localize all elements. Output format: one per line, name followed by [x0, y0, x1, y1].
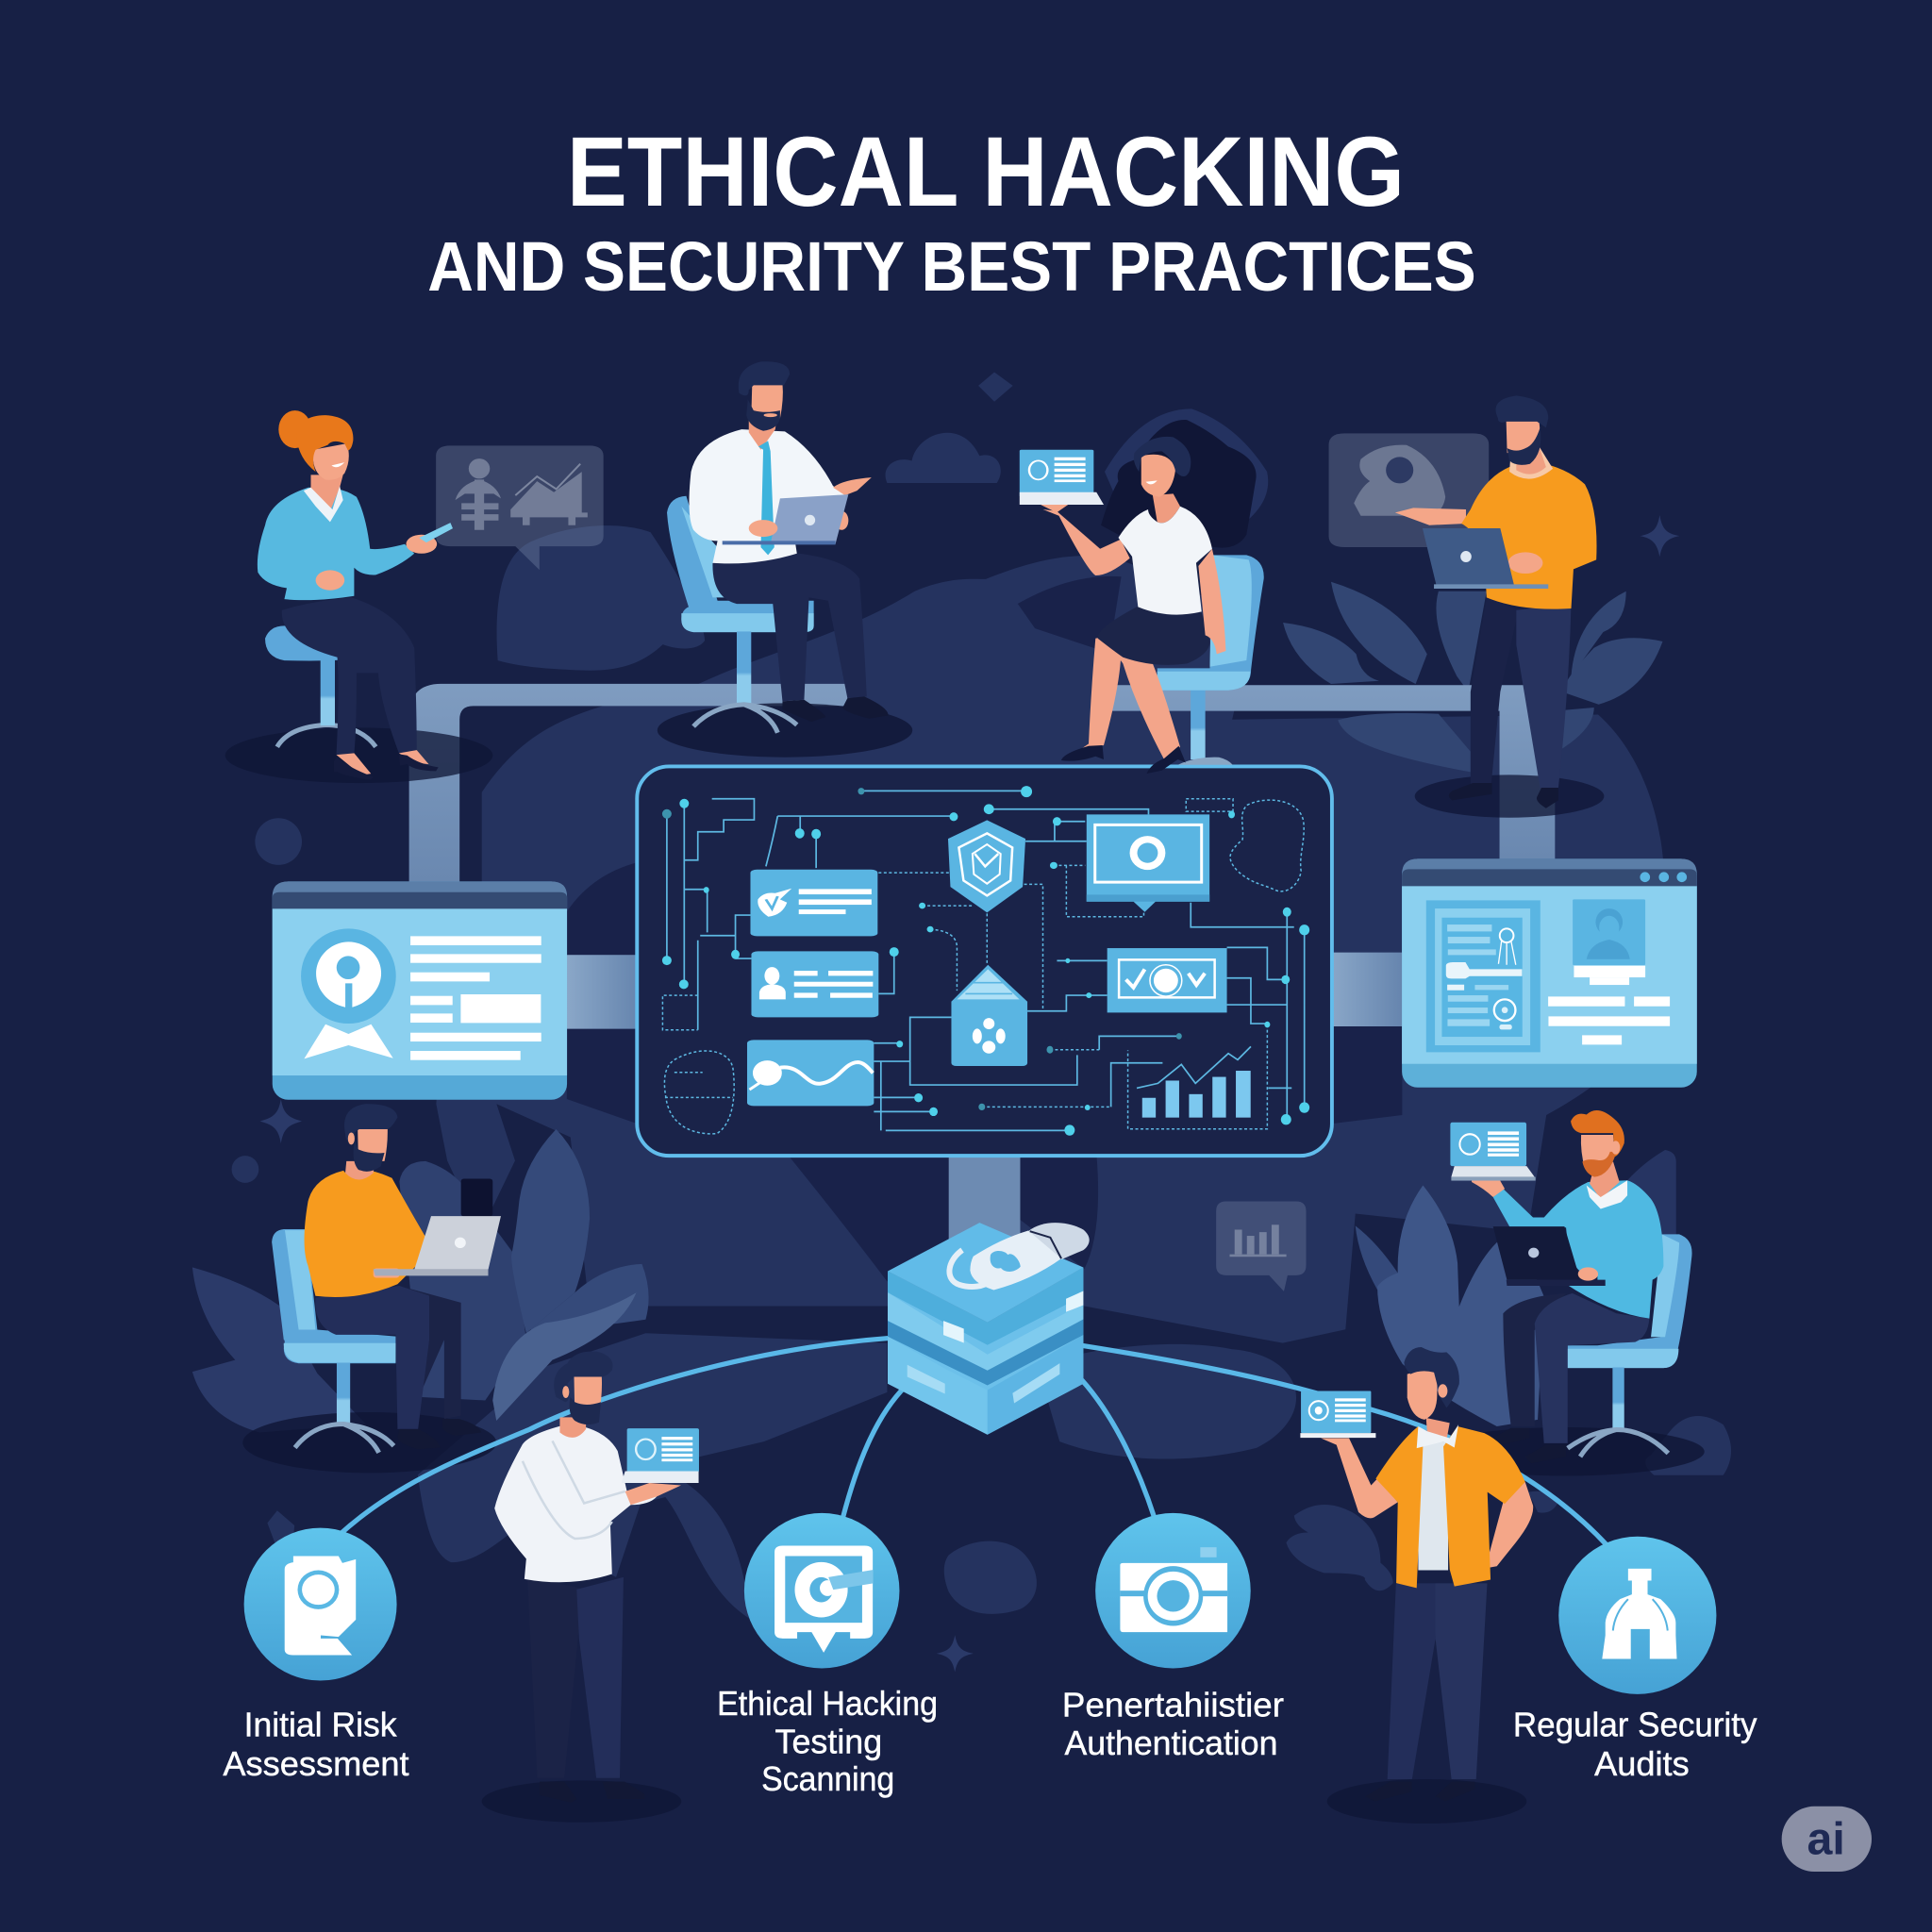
decorative leaves lower left: [192, 1129, 649, 1432]
icon: central shield: [948, 820, 1025, 912]
title: [427, 117, 1476, 306]
card: signal wave: [747, 1040, 874, 1106]
title: AND SECURITY BEST PRACTICES: [427, 227, 1476, 306]
label: initial risk assessment: Assessment: [223, 1744, 409, 1783]
server stack with USB key: [888, 1223, 1090, 1435]
icon: secure house: [951, 965, 1027, 1066]
card: user profile: [751, 951, 878, 1017]
label: penetration authentication: Authentication: [1064, 1724, 1277, 1762]
background blobs: [232, 372, 1663, 1619]
bar chart: [1142, 1071, 1251, 1118]
person: seated man in orange with silver laptop: [242, 1104, 501, 1473]
person: standing man in open orange shirt holding tablet: [1300, 1347, 1533, 1824]
circuit lines and nodes: [662, 791, 1305, 1134]
network curves: [339, 1338, 1607, 1546]
icon: security audits: [1558, 1537, 1716, 1694]
label: penetration authentication: Penertahiistier: [1062, 1685, 1284, 1724]
label: regular security audits: Regular Security: [1513, 1705, 1757, 1743]
speech bubble: shield emblem: [1329, 433, 1489, 547]
darker swirl accents: [567, 576, 1402, 1281]
label: ethical hacking testing scanning: [717, 1684, 938, 1798]
panel: left badge window: [273, 881, 567, 1100]
person: seated woman holding tablet: [1020, 408, 1268, 774]
title: ETHICAL HACKING: [567, 117, 1405, 227]
label: initial risk assessment: Initial Risk: [244, 1705, 397, 1743]
label: ethical hacking testing scanning: Ethical Hacking: [717, 1684, 938, 1723]
label: penetration authentication: [1062, 1685, 1284, 1762]
label: ethical hacking testing scanning: Scanning: [761, 1759, 894, 1798]
icon: penetration authentication: [1095, 1513, 1251, 1668]
icon: initial risk assessment: [244, 1528, 397, 1681]
card: approval checks: [1108, 948, 1227, 1012]
circuit dots: [662, 786, 1309, 1136]
central dashboard panel: [637, 766, 1332, 1156]
speech bubble: small bar chart: [1216, 1201, 1306, 1291]
ai badge: [1782, 1807, 1872, 1872]
panel: right profile window: [1402, 858, 1697, 1088]
ai badge: ai: [1807, 1814, 1845, 1865]
card: verified checklist: [750, 870, 877, 936]
label: regular security audits: Audits: [1594, 1744, 1690, 1783]
card: monitor with badge: [1087, 814, 1209, 912]
person: woman pointing at chart: [225, 410, 492, 783]
icon: ethical hacking testing: [744, 1513, 899, 1668]
person: standing man in orange with laptop: [1395, 395, 1604, 818]
decorative leaves lower right: [1286, 1150, 1676, 1591]
person: seated man in blue sweater with laptop: [1427, 1110, 1731, 1475]
decorative leaves upper right: [1283, 582, 1662, 772]
speech bubble: anatomy and chart: [436, 445, 604, 570]
label: initial risk assessment: [223, 1705, 409, 1783]
label: ethical hacking testing scanning: Testing: [775, 1723, 882, 1761]
connector pipes: [409, 684, 1555, 1245]
label: regular security audits: [1513, 1705, 1757, 1783]
person: standing man in white holding tablet: [482, 1352, 699, 1823]
person: man in white shirt with laptop: [658, 361, 912, 758]
decorative sparkles: [260, 515, 1679, 1672]
